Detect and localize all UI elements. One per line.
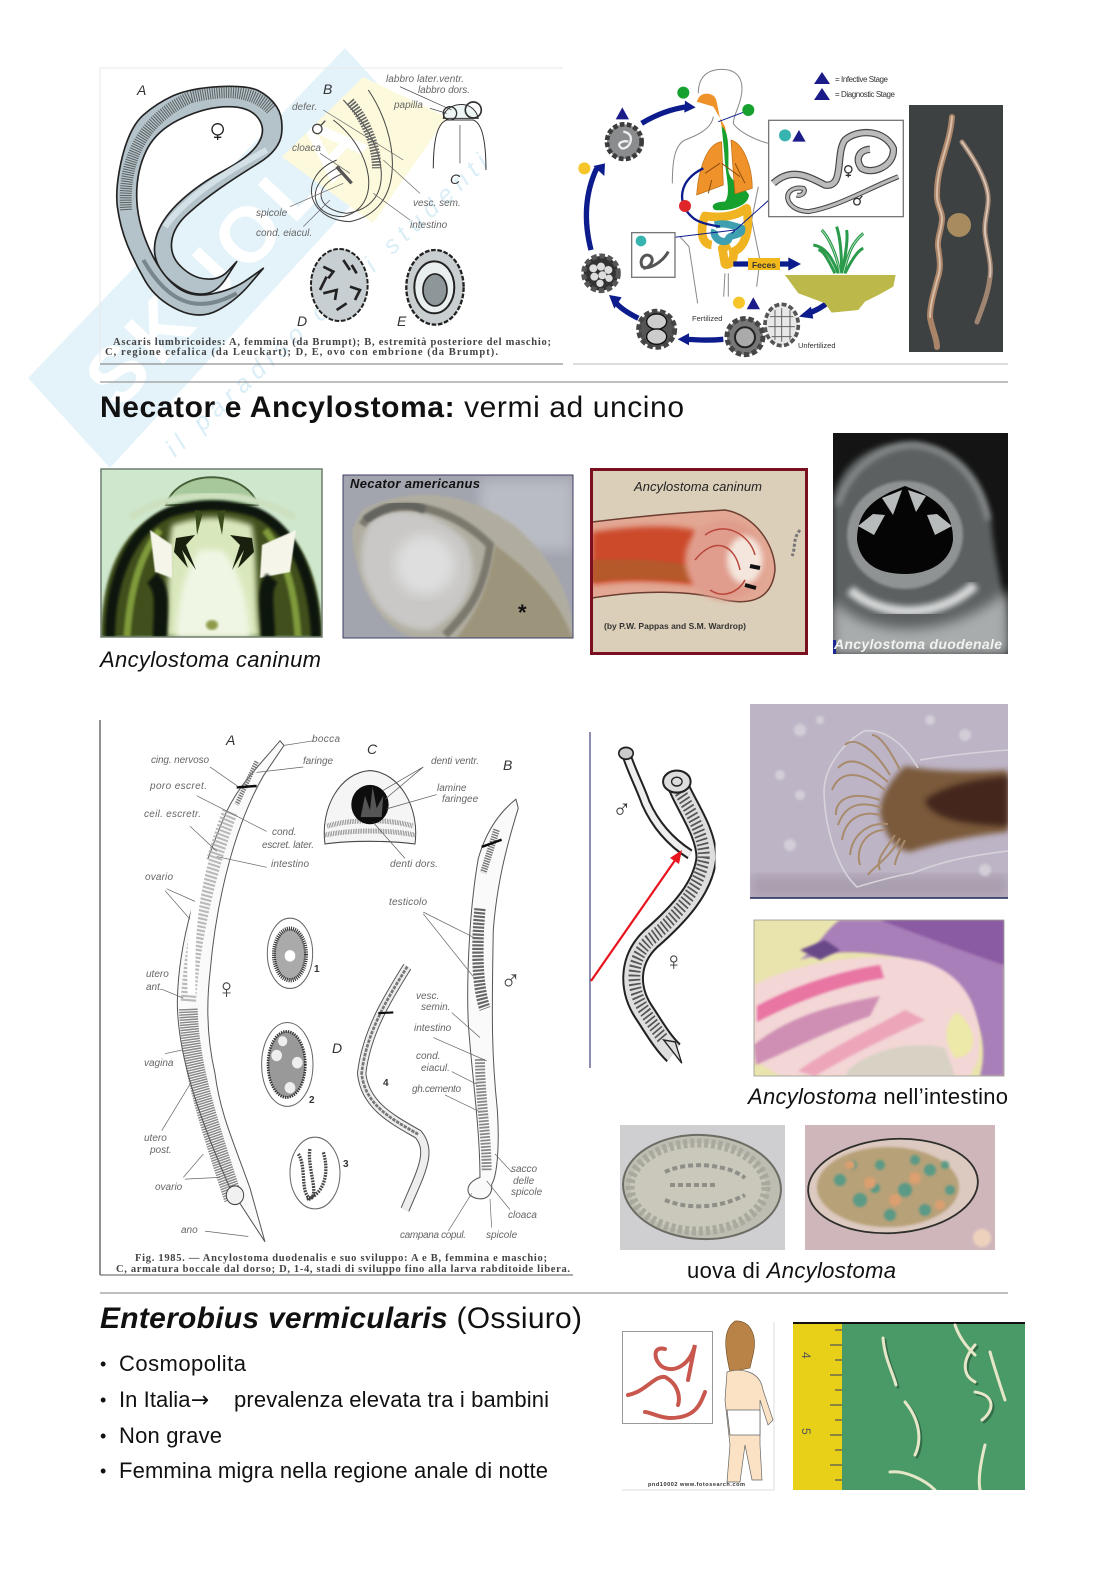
illustration: child with pinworms [622,1321,774,1490]
eggs D [262,918,340,1209]
labels: defer. [292,102,317,113]
female [633,786,706,1053]
photo: Necator americanus: Necator americanus [350,476,480,491]
photo: pinworms on ruler: 4 [799,1352,813,1359]
labels: spicole [256,208,288,219]
anatomy labels: eiacul. [421,1063,450,1074]
feces label: Feces [752,260,776,270]
anatomy caption [116,1253,570,1275]
labels [136,74,470,329]
divider [100,1292,1008,1294]
anatomy labels: sacco [511,1164,538,1175]
anatomy labels: lamine [437,783,467,794]
anatomy labels: 1 [314,964,320,975]
legend: = Infective Stage [835,75,889,84]
divider [100,381,1008,383]
soil and grass [785,227,896,313]
anatomy labels: bocca [312,734,340,745]
labels: vesc. sem. [413,198,461,209]
photo: Ancylostoma caninum stained: (by P.W. Pappas and S.M. Wardrop) [604,621,746,631]
red arrow [591,850,682,981]
figure: Ancylostoma duodenale anatomy [100,720,573,1275]
labels: cond. eiacul. [256,228,312,239]
labels: E [397,313,407,329]
anatomy labels: cond. [272,827,296,838]
labels: A [136,82,146,98]
stage numbers [578,87,760,309]
photo: Ancylostoma bursa [750,704,1008,898]
anatomy labels: cond. [416,1051,440,1062]
labels: B [323,81,332,97]
anatomy labels: escret. later. [262,840,314,851]
anatomy labels: spicole [511,1187,543,1198]
anatomy labels: gh.cemento [412,1084,461,1095]
male tail B [290,90,420,227]
photo: egg 1 [620,1125,785,1250]
figure: Ascaris lumbricoides drawing [100,68,563,364]
photo: Ancylostoma duodenale mouth: Ancylostoma duodenale [833,636,1002,652]
anatomy labels: vagina [144,1058,174,1069]
photo: Ancylostoma caninum mouth [101,469,322,637]
male [626,753,690,854]
labels: intestino [410,220,448,231]
figure: Ascaris life cycle [573,69,1008,364]
legend: = Diagnostic Stage [835,90,896,99]
anatomy caption: Fig. 1985. — Ancylostoma duodenalis e suo sviluppo: A e B, femmina e maschio; [135,1253,547,1264]
anatomy labels: cloaca [508,1210,537,1221]
figure: male and female worm in copula: ♀ [664,946,684,976]
labels: C [450,171,461,187]
inset: larva [632,233,675,277]
bullet list: Femmina migra nella regione anale di notte [119,1458,548,1483]
human body [672,69,768,303]
labels: cloaca [292,143,321,154]
bullet list: • [100,1354,106,1374]
bullet list: • [100,1426,106,1446]
anatomy labels: cing. nervoso [151,755,209,766]
bullet list: Non grave [119,1423,222,1448]
anatomy labels: denti dors. [390,859,438,870]
bullet list [100,1351,549,1483]
anatomy labels: ano [181,1225,198,1236]
anatomy labels: ovario [145,872,173,883]
head C [400,87,486,170]
figure: male and female worm in copula [590,732,706,1068]
anatomy labels: B [503,757,512,773]
anatomy labels: ovario [155,1182,183,1193]
legend [814,72,896,100]
bullet list: Cosmopolita [119,1351,247,1376]
bullet list: In Italia→ [119,1387,209,1413]
illustration: child with pinworms: pnd10002 www.fotosearch.com [648,1482,745,1488]
larva 4 [362,967,425,1210]
eggs D and E [311,249,464,325]
coin [947,213,971,237]
caption [105,337,551,358]
anatomy labels: faringee [442,794,479,805]
anatomy labels [144,732,543,1241]
anatomy labels: 4 [383,1078,389,1089]
anatomy labels: delle [513,1176,535,1187]
head C [324,767,437,858]
anatomy labels: utero [146,969,169,980]
photo: Necator americanus: * [518,600,527,625]
worm A female [162,741,313,1242]
anatomy labels: 2 [309,1095,315,1106]
anatomy labels: intestino [414,1023,452,1034]
photo: Ancylostoma caninum stained [592,470,806,654]
anatomy labels: semin. [421,1002,450,1013]
eggs of the cycle [584,124,798,355]
photo: egg 2 [805,1125,995,1250]
anatomy labels: intestino [271,859,309,870]
feces label [748,258,780,270]
anatomy labels: 3 [343,1159,349,1170]
photo: adult Ascaris worms with coin [909,105,1003,352]
anatomy caption: C, armatura boccale dal dorso; D, 1-4, stadi di sviluppo fino alla larva rabditoide libera. [116,1264,570,1275]
caption: Ancylostoma caninum: Ancylostoma caninum [98,647,321,672]
labels: labbro later.ventr. [386,74,464,85]
anatomy labels: ♀ [216,973,237,1004]
bullet list: • [100,1390,106,1410]
anatomy labels: spicole [486,1230,518,1241]
figure: male and female worm in copula: ♂ [612,794,632,824]
caption: C, regione cefalica (da Leuckart); D, E, ovo con embrione (da Brumpt). [105,347,498,358]
bullet list: • [100,1461,106,1481]
stage labels: Fertilized [692,314,722,323]
arrows of the cycle [586,101,838,345]
watermark: Skuola ribbon: SKUOLA [67,96,382,423]
heading: Necator e Ancylostoma: Necator e Ancylostoma: vermi ad uncino [100,391,684,424]
anatomy labels: campana copul. [400,1230,466,1241]
anatomy labels: post. [149,1145,172,1156]
inset: adult worms [769,120,903,217]
anatomy labels: utero [144,1133,167,1144]
anatomy labels: poro escret. [149,781,207,792]
anatomy labels: denti ventr. [431,756,479,767]
photo: Ancylostoma caninum stained: Ancylostoma caninum [633,479,762,494]
stage labels: Unfertilized [798,341,836,350]
watermark: Skuola ribbon [28,48,495,468]
anatomy labels: C [367,741,378,757]
photo: Ancylostoma in intestine histology [754,920,1004,1076]
caption: Ascaris lumbricoides: A, femmina (da Brumpt); B, estremità posteriore del maschio; [113,337,551,348]
bullet list: prevalenza elevata tra i bambini [234,1387,549,1412]
photo: pinworms on ruler: 5 [799,1428,813,1435]
labels: D [297,313,307,329]
labels: labbro dors. [418,85,470,96]
caption: uova di Ancylostoma: uova di Ancylostoma [687,1258,896,1283]
child figure [725,1321,773,1482]
heading: Enterobius vermicularis: Enterobius vermicularis (Ossiuro) [100,1302,582,1335]
anatomy labels: faringe [303,756,333,767]
pinworms inset [622,1332,712,1424]
female worm A [117,86,282,315]
anatomy labels: A [225,732,235,748]
anatomy labels: vesc. [416,991,439,1002]
anatomy labels: ant. [146,982,163,993]
anatomy labels: testicolo [389,897,427,908]
anatomy labels: ceil. escretr. [144,809,201,820]
caption: Ancylostoma nell'intestino: Ancylostoma nell’intestino [746,1084,1008,1109]
labels: papilla [393,100,423,111]
photo: Ancylostoma duodenale mouth [833,433,1008,654]
stage labels [692,314,836,350]
anatomy labels: ♂ [500,965,521,996]
anatomy labels: D [332,1040,342,1056]
watermark: Skuola ribbon: il paradiso degli studenti [160,148,495,462]
photo: pinworms on ruler [793,1322,1025,1490]
photo: Necator americanus [343,475,573,640]
worm B male [423,799,518,1231]
